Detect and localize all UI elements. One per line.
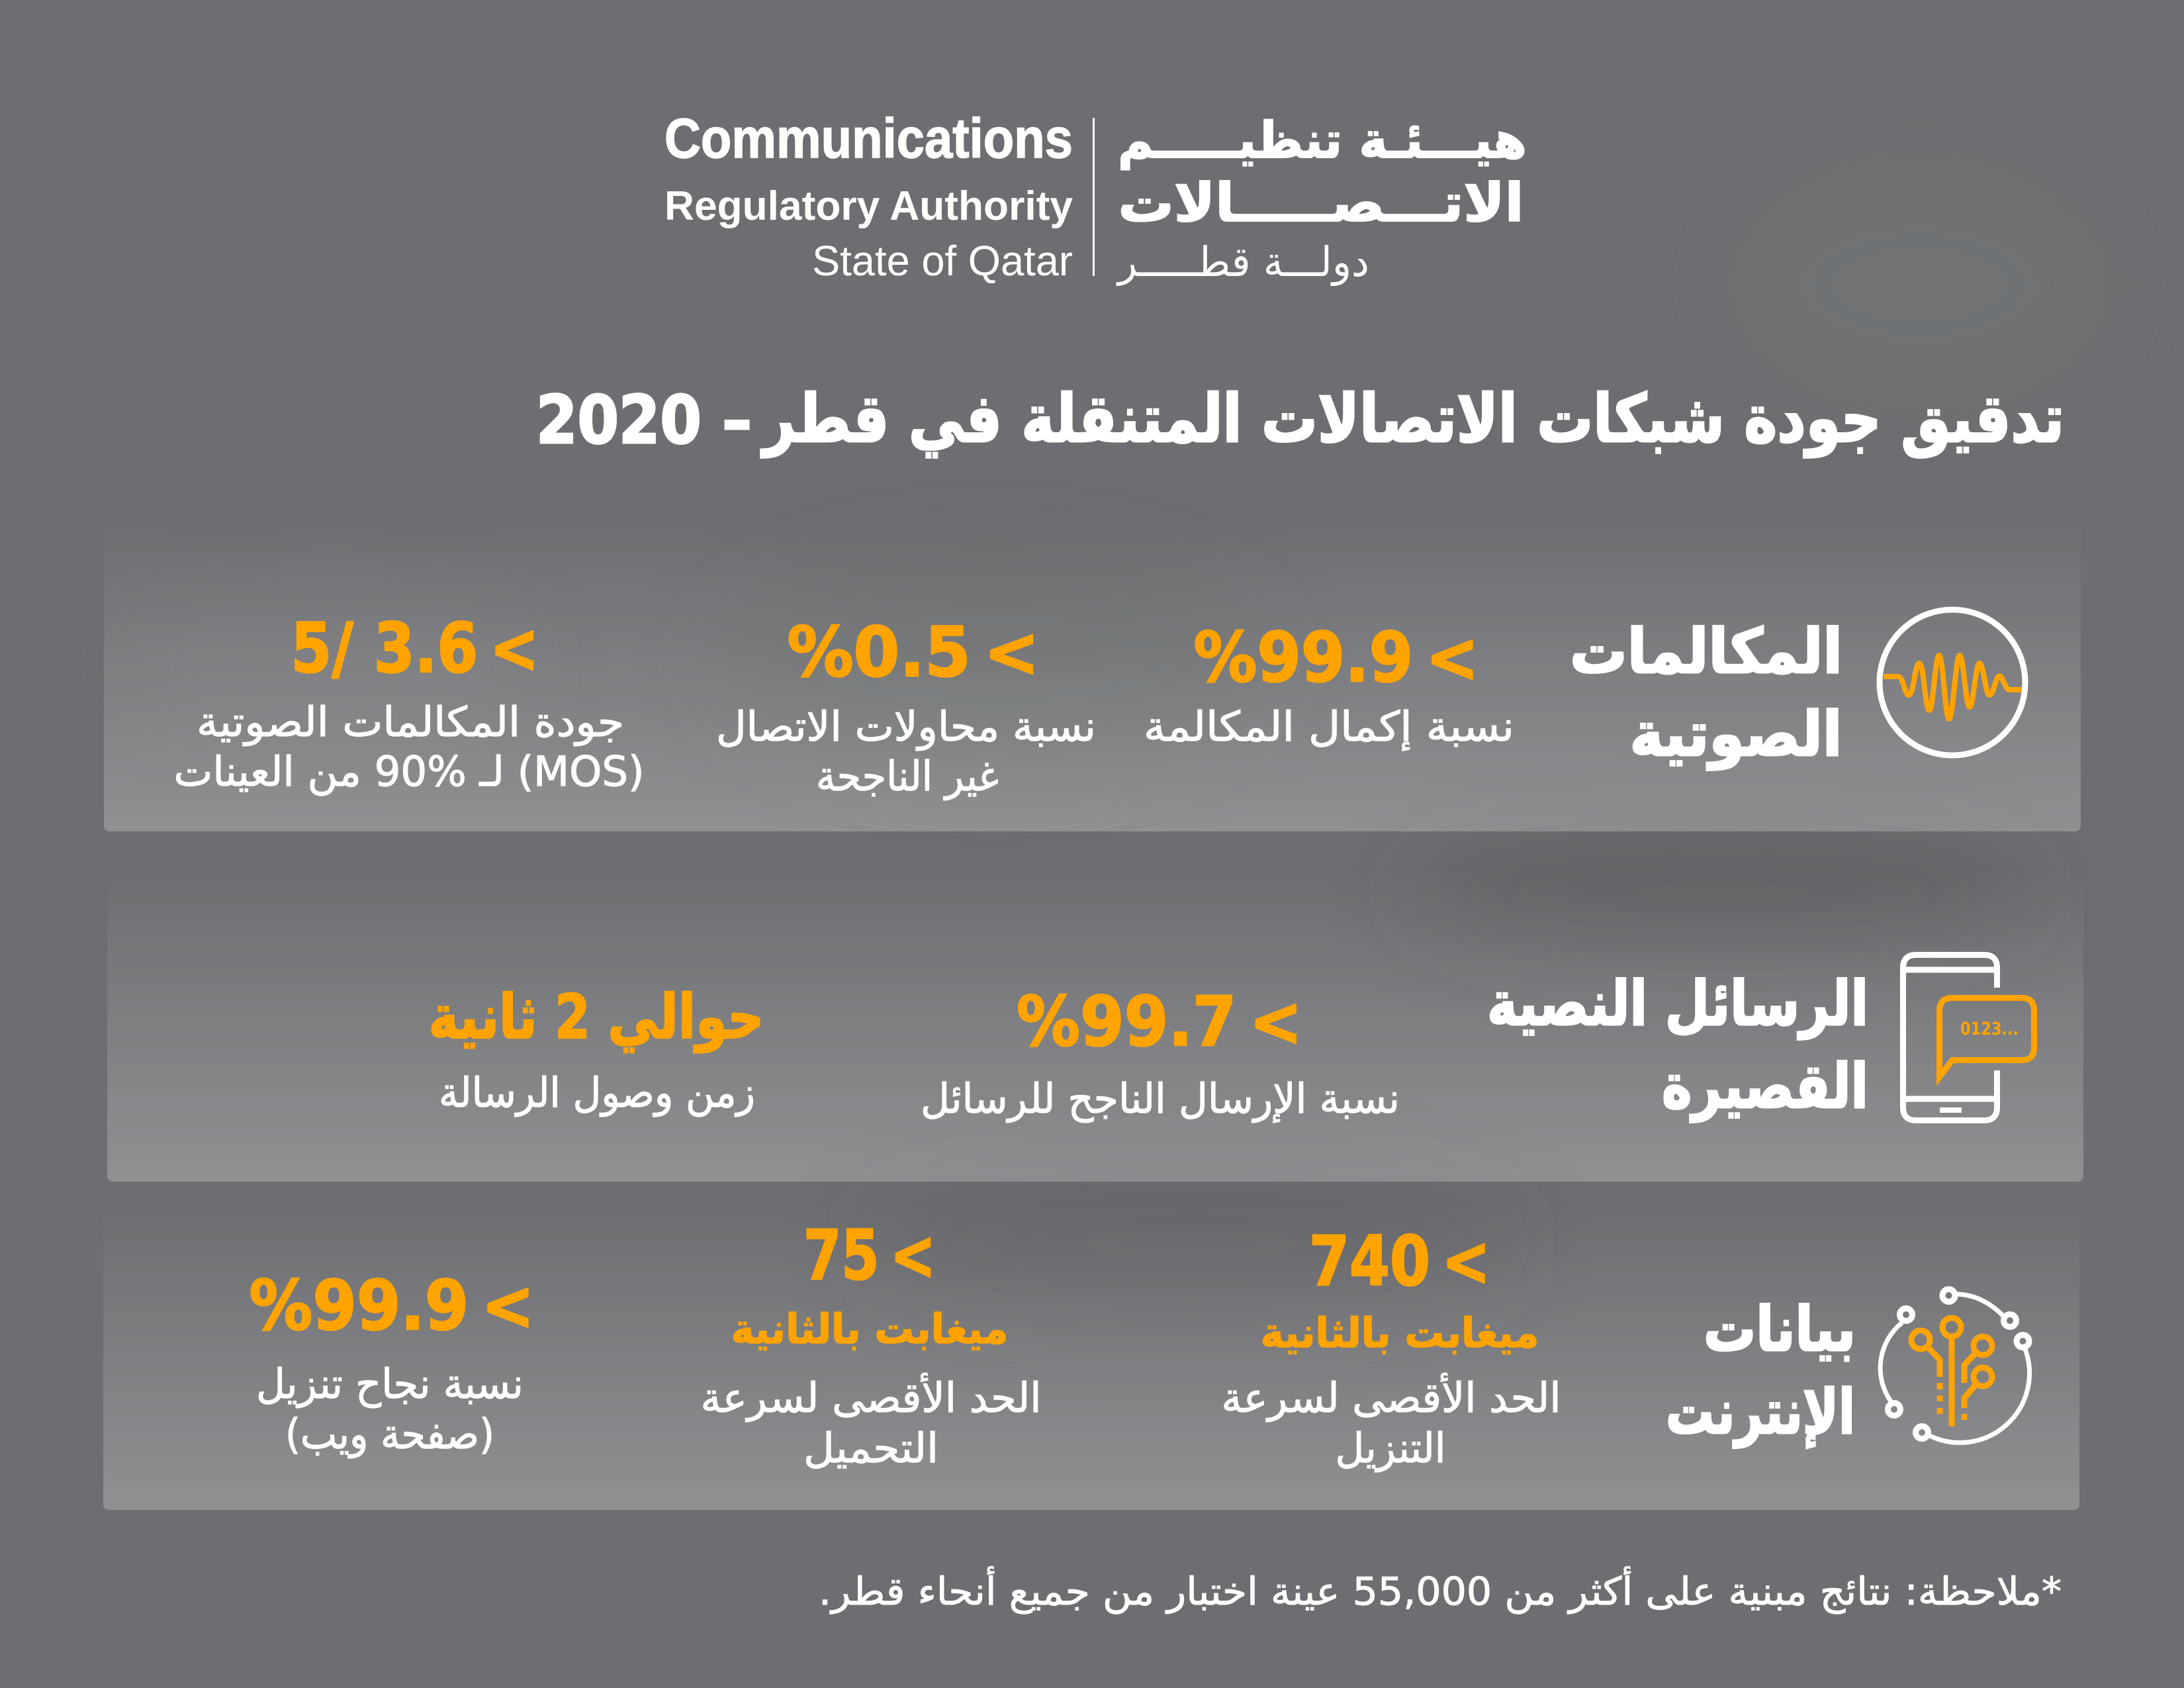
metric: voice quality MOS <box>173 609 644 796</box>
heading: voice calls: الصوتية <box>1629 698 1843 771</box>
metric: SMS delivery time <box>429 982 764 1117</box>
panel: SMS <box>107 864 2083 1182</box>
icon: phone with message: 0123... <box>1960 1019 2019 1039</box>
metric: web download success: نسبة نجاح تنزيل <box>256 1360 523 1408</box>
heading: SMS: القصيرة <box>1662 1051 1868 1123</box>
metric: call completion rate: نسبة إكمال المكالمة <box>1144 702 1514 751</box>
metric: max upload speed: ميغابت بالثانية <box>731 1305 1009 1353</box>
logo: دولـــة قطـــــر <box>1116 238 1369 286</box>
metric: failed call attempts: %0.5 < <box>788 613 1039 692</box>
heading: voice calls <box>1570 616 1843 771</box>
heading: voice calls: المكالمات <box>1570 616 1843 687</box>
metric: max download speed <box>1222 1222 1561 1472</box>
icon: circuit <box>1880 1289 2029 1442</box>
heading: internet data: بيانات <box>1704 1293 1856 1365</box>
title: 2020 – <box>536 381 752 459</box>
metric: SMS delivery rate <box>921 982 1400 1123</box>
metric: web download success <box>249 1266 535 1458</box>
metric: max upload speed: الحد الأقصى لسرعة <box>700 1372 1042 1422</box>
metric: max upload speed: 75 < <box>803 1216 936 1295</box>
metric: web download success: (صفحة ويب) <box>285 1410 494 1458</box>
metric: failed call attempts: غير الناجحة <box>816 752 999 800</box>
heading: internet data <box>1666 1293 1856 1448</box>
metric: SMS delivery time: حوالي 2 ثانية <box>429 982 764 1053</box>
metric: max download speed: الحد الأقصى لسرعة <box>1222 1372 1561 1422</box>
metric: voice quality MOS: 5/ 3.6 < <box>291 609 539 688</box>
logo: الاتـــصـــــالات <box>1118 172 1524 234</box>
metric: SMS delivery rate: %99.7 < <box>1017 982 1302 1062</box>
heading: SMS <box>1487 968 1868 1123</box>
metric: voice quality MOS: جودة المكالمات الصوتية <box>197 698 624 746</box>
footnote: *ملاحظة: نتائج مبنية على أكثر من 55,000 عينة اختبار من جميع أنحاء قطر. <box>819 1566 2062 1615</box>
logo: هيـــئـة تنظيـــــم <box>1118 111 1527 170</box>
metric: max download speed: 740 < <box>1309 1222 1490 1301</box>
metric: failed call attempts <box>716 613 1096 800</box>
metric: call completion rate: %99.9 < <box>1194 618 1479 698</box>
metric: max upload speed <box>700 1216 1042 1472</box>
metric: max download speed: ميغابت بالثانية <box>1260 1309 1539 1357</box>
logo: Regulatory Authority <box>664 183 1073 229</box>
panel: internet data <box>103 1198 2079 1510</box>
heading: internet data: الإنترنت <box>1666 1376 1855 1448</box>
metric: max download speed: التنزيل <box>1336 1424 1445 1472</box>
heading: SMS: الرسائل النصية <box>1487 968 1868 1040</box>
metric: voice quality MOS: (MOS) لـ %90 من العينات <box>173 747 644 796</box>
logo: Communications <box>664 107 1073 169</box>
icon: phone with message <box>1903 955 2034 1120</box>
metric: max upload speed: التحميل <box>803 1424 938 1472</box>
metric: web download success: %99.9 < <box>249 1266 535 1346</box>
logo: State of Qatar <box>812 237 1073 285</box>
metric: SMS delivery rate: نسبة الإرسال الناجح للرسائل <box>921 1074 1400 1123</box>
metric: SMS delivery time: زمن وصول الرسالة <box>439 1068 755 1117</box>
panel: voice calls <box>104 510 2081 831</box>
logo <box>664 107 1527 286</box>
icon: sound wave <box>1880 610 2025 755</box>
metric: call completion rate <box>1144 618 1514 751</box>
metric: failed call attempts: نسبة محاولات الاتصال <box>716 702 1096 751</box>
